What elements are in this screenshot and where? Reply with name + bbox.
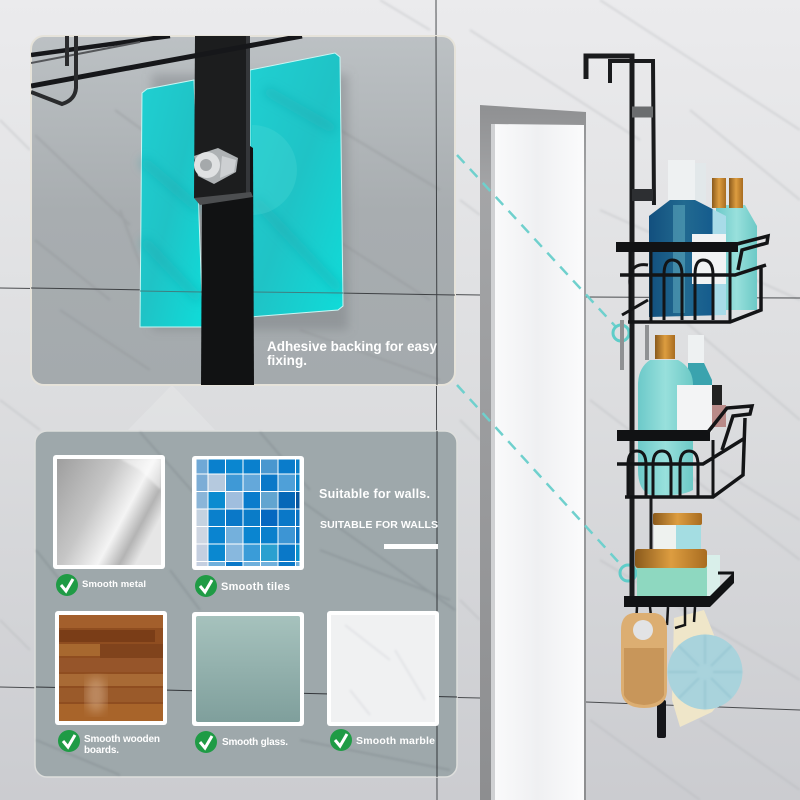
caption: adhesive backing: fixing. bbox=[267, 353, 307, 368]
bolt bbox=[194, 148, 238, 184]
large teal bottle bbox=[638, 360, 693, 495]
rear pale box bbox=[706, 555, 720, 597]
panel: adhesive backing close-up bbox=[31, 36, 455, 386]
label: smooth marble: Smooth marble bbox=[356, 735, 435, 747]
check icon: tiles bbox=[195, 575, 217, 597]
door with gray frame bbox=[480, 105, 586, 800]
check icon: marble bbox=[330, 729, 352, 751]
check icon: glass bbox=[195, 731, 217, 753]
surface: smooth glass bbox=[192, 612, 304, 753]
comb bbox=[657, 700, 666, 738]
suction ring bbox=[252, 125, 297, 215]
white pump bbox=[688, 335, 704, 365]
lower jar bbox=[635, 549, 707, 597]
bottom shelf tray bbox=[624, 572, 734, 607]
heading: suitable for walls: Suitable for walls. bbox=[319, 487, 430, 501]
cyan adhesive card right half bbox=[250, 53, 343, 317]
basket 2 bbox=[617, 406, 752, 497]
label: smooth wooden boards: boards. bbox=[84, 745, 119, 756]
surface: smooth wooden boards bbox=[55, 611, 167, 756]
caption: adhesive backing bbox=[267, 339, 437, 368]
label: smooth wooden boards: Smooth wooden bbox=[84, 734, 160, 745]
boxes bbox=[677, 385, 712, 432]
card shadow bbox=[152, 74, 348, 330]
bottom shelf jars bbox=[635, 513, 720, 597]
hanger frame bbox=[586, 56, 654, 600]
marble veins in close-up bbox=[36, 110, 414, 224]
blue bottle bbox=[649, 160, 726, 317]
tile seams in close-up bbox=[31, 36, 455, 385]
check icon: wood bbox=[58, 730, 80, 752]
marble veins in panel bbox=[36, 432, 455, 775]
surface: smooth metal bbox=[53, 455, 165, 596]
label: smooth glass: Smooth glass. bbox=[222, 737, 288, 748]
middle shelf bottles bbox=[638, 335, 726, 495]
dashed teal pointer: lower bbox=[457, 385, 636, 581]
diagonal rails at top bbox=[31, 36, 302, 104]
dashed teal pointer: upper bbox=[457, 155, 629, 341]
surface: smooth tiles bbox=[192, 456, 304, 597]
heading: suitable for walls: SUITABLE FOR WALLS bbox=[320, 519, 438, 531]
tile mosaic bbox=[196, 459, 300, 566]
panel: suitable surfaces bbox=[35, 431, 457, 777]
cloth bbox=[672, 610, 722, 727]
shower caddy bbox=[586, 56, 768, 738]
connector wedge between panels bbox=[128, 385, 215, 430]
hooks under tray bbox=[636, 607, 695, 628]
cyan adhesive card left half bbox=[140, 80, 203, 327]
wooden scrub brush bbox=[621, 613, 667, 708]
gold pump bbox=[655, 335, 675, 359]
blue flower sponge bbox=[668, 634, 742, 710]
heading: suitable for walls bbox=[319, 487, 438, 549]
check icon: metal bbox=[56, 574, 78, 596]
small teal bottle bbox=[688, 363, 712, 405]
caption: adhesive backing: Adhesive backing for easy bbox=[267, 339, 437, 354]
seams in panel bbox=[36, 431, 457, 777]
small hooks under basket 1 bbox=[622, 320, 647, 370]
upper black bar bbox=[194, 36, 250, 200]
label: smooth tiles: Smooth tiles bbox=[221, 581, 290, 593]
wood planks bbox=[59, 615, 163, 721]
basket 1 bbox=[616, 236, 768, 322]
label: smooth metal: Smooth metal bbox=[82, 579, 146, 590]
back teal bottles bbox=[712, 178, 757, 310]
tile seam over card bbox=[140, 291, 343, 293]
label card bbox=[692, 234, 726, 284]
lower black bar bbox=[201, 146, 254, 386]
upper jar bbox=[653, 513, 702, 553]
top shelf bottles bbox=[649, 160, 757, 317]
card marble shading bbox=[142, 90, 340, 300]
surface: smooth marble bbox=[327, 611, 439, 751]
label: smooth wooden boards bbox=[84, 734, 160, 756]
